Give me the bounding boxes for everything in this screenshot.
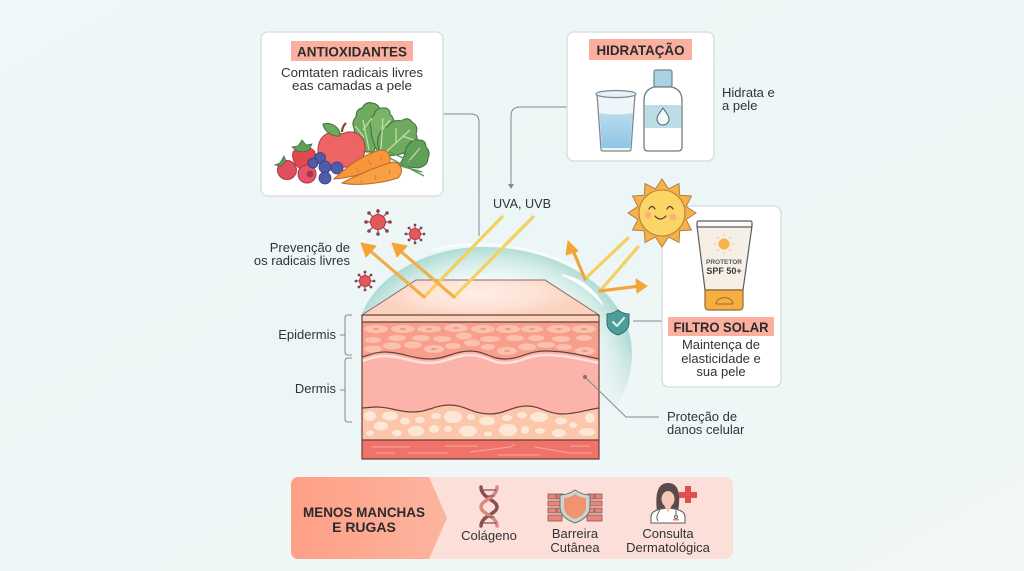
epidermis layer (362, 322, 599, 359)
text: hydrates the skin (722, 85, 775, 113)
text: hydrates the skin: a pele (722, 98, 757, 113)
text: prevention of free radicals (254, 240, 350, 268)
heading: hydration: HIDRATAÇÃO (596, 41, 685, 58)
heading: antioxidants: ANTIOXIDANTES (297, 44, 407, 60)
text: protection from cell damage (667, 409, 745, 437)
stratum corneum (362, 315, 599, 322)
icon: skin barrier (548, 490, 602, 523)
icon: sunscreen tube: SPF 50+ (706, 266, 742, 276)
connector: sunscreen to shield (633, 320, 662, 322)
label: dermis: Dermis (295, 381, 336, 396)
skin top surface (362, 280, 599, 315)
label: collagen: Colágeno (461, 528, 517, 543)
label: UVA UVB: UVA, UVB (493, 196, 551, 211)
arrow banner: fewer spots and wrinkles (291, 477, 447, 559)
text: sunscreen description: elasticidade e (681, 351, 761, 366)
icon: smiling sun (628, 179, 696, 247)
label: epidermis: Epidermis (278, 327, 336, 342)
icon: sunscreen tube: PROTETOR (706, 259, 742, 266)
text: sunscreen description: Maintença de (682, 337, 760, 352)
skin cross-section (362, 280, 599, 459)
label: skin barrier (550, 526, 600, 555)
connector: hydration to UV (508, 107, 567, 189)
icon: fruits and vegetables (275, 103, 429, 184)
heading: sunscreen: FILTRO SOLAR (674, 319, 768, 335)
label: dermatology consultation (626, 526, 711, 555)
bracket: epidermis (340, 315, 352, 355)
icon: water bottle (644, 70, 682, 151)
icon: medical cross (679, 486, 697, 503)
icon: DNA (481, 487, 497, 526)
text: antioxidants description: Comtaten radicais livres (281, 65, 424, 80)
subcutaneous fat layer (362, 405, 599, 440)
panel: sunscreen (662, 206, 781, 387)
icon: free radical large (364, 209, 392, 236)
protective dome (362, 244, 640, 415)
arrow banner: fewer spots and wrinkles: E RUGAS (332, 519, 396, 535)
icon: dermatologist (651, 483, 685, 523)
arrows: UV rays reflected left (361, 217, 533, 297)
label: dermatology consultation: Consulta (642, 526, 694, 541)
text: protection from cell damage: Proteção de (667, 409, 737, 424)
label: skin barrier: Cutânea (550, 540, 600, 555)
bracket: dermis (340, 358, 352, 422)
muscle layer (362, 440, 599, 459)
icon: free radical lower (355, 271, 375, 291)
panel: antioxidants (261, 32, 443, 196)
icon: glass of water (596, 90, 636, 151)
connector: antioxidants to UV (443, 114, 479, 236)
label: dermatology consultation: Dermatológica (626, 540, 711, 555)
panel: benefits band (291, 477, 733, 559)
connector: cell damage protection (583, 375, 659, 417)
arrow banner: fewer spots and wrinkles: MENOS MANCHAS (303, 504, 425, 520)
heading: hydration (589, 39, 692, 60)
text: antioxidants description line 2: eas camadas a pele (292, 78, 412, 93)
icon: free radical small (405, 224, 425, 244)
panel: hydration (567, 32, 714, 161)
arrows: UV rays reflected right (566, 238, 647, 293)
text: sunscreen description (681, 337, 761, 379)
text: sunscreen description: sua pele (696, 364, 746, 379)
text: prevention of free radicals: os radicais livres (254, 253, 350, 268)
dermis layer (362, 351, 599, 414)
icon: shield with check (607, 310, 629, 335)
text: prevention of free radicals: Prevenção de (270, 240, 350, 255)
text: hydrates the skin: Hidrata e (722, 85, 775, 100)
text: protection from cell damage: danos celular (667, 422, 745, 437)
label: skin barrier: Barreira (552, 526, 599, 541)
skin outlines (362, 315, 599, 459)
icon: sunscreen tube (697, 221, 752, 310)
